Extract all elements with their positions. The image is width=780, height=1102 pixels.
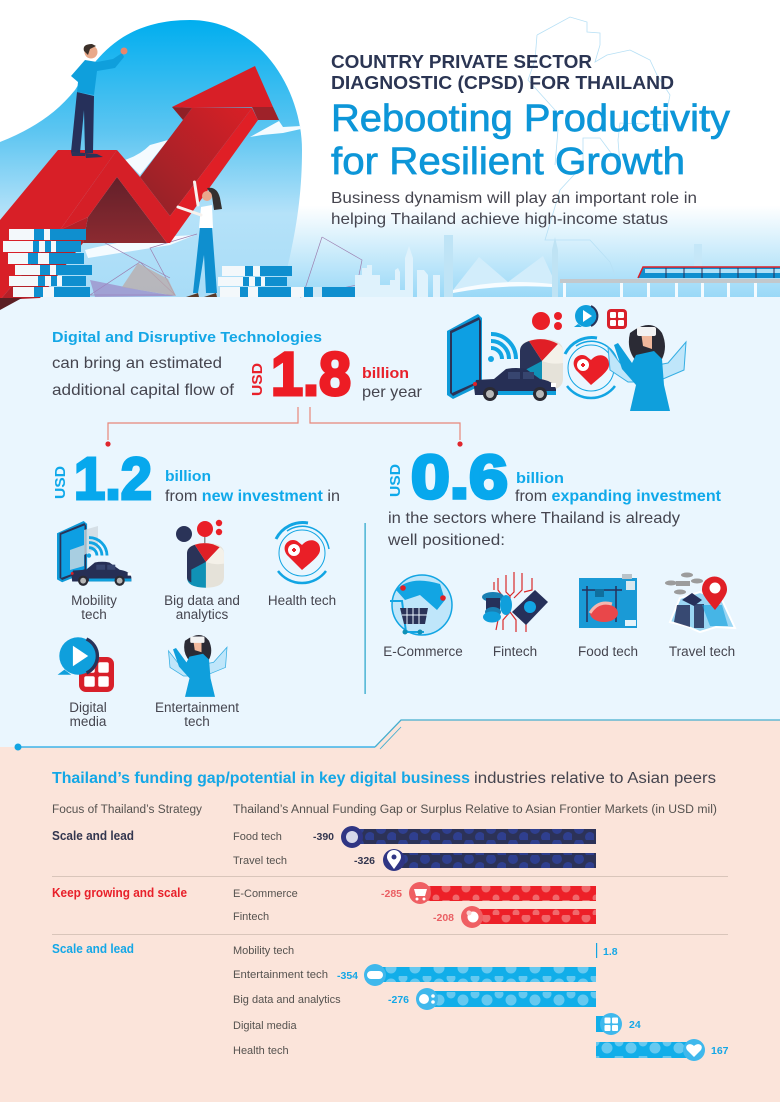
tower	[444, 235, 453, 297]
clouds	[85, 121, 301, 258]
intro text	[52, 329, 322, 399]
bar row: Health tech: 167	[711, 1045, 729, 1057]
big number: USD 0.6 billion: in the sectors where Thailand is already	[388, 510, 680, 527]
intro text: Digital and Disruptive Technologies	[52, 329, 322, 346]
big number: USD 0.6 billion: 0.6	[411, 443, 508, 511]
panel: funding gap	[0, 720, 780, 1102]
icon item: Food tech	[578, 574, 638, 659]
icon: data dots	[532, 312, 562, 330]
network lines	[85, 232, 362, 297]
bar row: Big data and analytics: -276	[388, 994, 409, 1006]
icon item: Health tech	[268, 523, 336, 608]
bridge	[453, 256, 554, 290]
icon item: Travel tech: Travel tech	[669, 644, 735, 659]
bar row: Travel tech: -326	[354, 855, 375, 867]
icon item: Fintech	[482, 572, 548, 659]
icon item: Digital media	[58, 637, 114, 729]
bar row: Entertainment tech	[233, 964, 596, 986]
bar row: Travel tech: Travel tech	[233, 855, 287, 867]
man standing	[71, 44, 128, 158]
illustration: Bangkok skyline and train	[355, 235, 780, 297]
bar row: Travel tech	[233, 849, 596, 871]
main title: Rebooting Productivity	[331, 98, 730, 140]
woman lifting arrow	[178, 182, 222, 297]
red arrow	[0, 66, 279, 310]
report label	[331, 52, 674, 93]
intro text: can bring an estimated	[52, 355, 222, 372]
panel: digital technologies background	[0, 297, 780, 757]
icon item: Big data and analytics: Big data and	[164, 593, 240, 608]
subtitle	[331, 190, 697, 228]
bar row: Mobility tech: 1.8	[603, 946, 618, 958]
bar row: Entertainment tech: Entertainment tech	[233, 969, 328, 981]
connector to 0.6 billion	[310, 407, 463, 447]
icon: play	[574, 305, 597, 327]
big number: USD 1.8 billion per year: 1.8	[271, 340, 351, 408]
column headers: Focus of Thailand’s Strategy	[52, 804, 202, 816]
report label: DIAGNOSTIC (CPSD) FOR THAILAND	[331, 73, 674, 93]
rail viaduct	[560, 279, 780, 283]
map of Thailand outline	[528, 17, 670, 275]
hero technology icons	[447, 305, 686, 411]
icon: health	[565, 338, 618, 398]
bridge deck	[453, 282, 552, 293]
big number: USD 1.2 billion: 1.2	[74, 446, 152, 512]
icon item: Big data and analytics	[164, 520, 240, 622]
report label: COUNTRY PRIVATE SECTOR	[331, 52, 592, 72]
big number: USD 1.2 billion: billion	[165, 468, 211, 485]
bar row: Mobility tech: Mobility tech	[233, 945, 294, 957]
big number: USD 0.6 billion: well positioned:	[387, 532, 505, 549]
icon: apps	[607, 309, 627, 329]
stack of books left	[3, 229, 92, 297]
bar row: Digital media	[233, 1013, 641, 1035]
bar row: Entertainment tech: -354	[337, 970, 358, 982]
big number: USD 1.8 billion per year: billion	[362, 365, 409, 382]
stack of books right	[218, 266, 355, 297]
icon item: Mobility tech: tech	[81, 607, 107, 622]
bar row: Digital media: 24	[629, 1019, 641, 1031]
icon: database	[520, 339, 563, 391]
icon item: Entertainment tech: tech	[184, 714, 210, 729]
bar row: Health tech: Health tech	[233, 1045, 289, 1057]
icon item: Fintech: Fintech	[493, 644, 537, 659]
title block	[331, 52, 730, 228]
strategy group labels: Keep growing and scale	[52, 886, 187, 900]
main title: for Resilient Growth	[331, 141, 685, 183]
big number: USD 1.2 billion: USD	[52, 466, 69, 499]
icon item: Mobility tech: Mobility	[71, 593, 117, 608]
icon item: Entertainment tech: Entertainment	[155, 700, 239, 715]
bar row: Food tech: -390	[313, 831, 334, 843]
subtitle: Business dynamism will play an important role in	[331, 190, 697, 207]
strategy group labels	[52, 829, 187, 956]
icon item: Mobility tech	[57, 521, 131, 622]
column headers	[52, 804, 717, 816]
funding heading: Thailand’s funding gap/potential in key digital business	[52, 770, 470, 787]
icon item: Food tech: Food tech	[578, 644, 638, 659]
big number: USD 1.2 billion: from new investment in	[165, 488, 340, 505]
illustration: hero with arrow and figures	[0, 20, 362, 310]
bar row: Digital media: Digital media	[233, 1020, 297, 1032]
icon item: Digital media: Digital	[69, 700, 107, 715]
bar row: Health tech	[233, 1039, 729, 1061]
icon: phone	[447, 314, 482, 399]
icon item: Entertainment tech	[155, 635, 239, 729]
big number: USD 0.6 billion: from expanding investment	[515, 488, 721, 505]
big number: USD 1.8 billion per year: USD	[249, 363, 266, 396]
big number: USD 1.2 billion	[52, 446, 340, 512]
bar row: Food tech	[233, 826, 596, 848]
bar row: Mobility tech	[233, 943, 618, 958]
bar row: Fintech	[233, 906, 596, 928]
sky blob	[0, 20, 302, 297]
skyline	[355, 246, 440, 297]
far tower	[694, 244, 702, 268]
subtitle: helping Thailand achieve high-income status	[331, 211, 668, 228]
train	[638, 267, 780, 278]
connector to 1.2 billion	[105, 407, 298, 447]
bar row: Food tech: Food tech	[233, 831, 282, 843]
main title	[331, 98, 730, 183]
spire	[552, 237, 558, 297]
network facets	[90, 280, 175, 297]
big number: USD 0.6 billion	[387, 443, 721, 549]
bar row: E-Commerce: E-Commerce	[233, 888, 298, 900]
bar row: Fintech: -208	[433, 912, 454, 924]
funding heading	[52, 770, 716, 787]
bar row: Big data and analytics: Big data and analytics	[233, 994, 341, 1006]
panel: header background	[0, 0, 780, 298]
icon item: Travel tech	[665, 572, 735, 659]
bar row: Fintech: Fintech	[233, 911, 269, 923]
icon item: Health tech: Health tech	[268, 593, 336, 608]
icon item: Big data and analytics: analytics	[176, 607, 229, 622]
icon: VR woman	[608, 325, 686, 411]
big number: USD 1.8 billion per year: per year	[362, 384, 423, 401]
bar row: Big data and analytics	[233, 988, 596, 1010]
strategy group labels: Scale and lead	[52, 829, 134, 843]
strategy group labels: Scale and lead	[52, 942, 134, 956]
funding heading: industries relative to Asian peers	[474, 770, 716, 787]
viaduct pillars	[563, 283, 757, 297]
icon item: E-Commerce	[383, 575, 463, 659]
bar row: E-Commerce: -285	[381, 888, 402, 900]
network facet	[122, 263, 176, 296]
intro text: additional capital flow of	[52, 382, 235, 399]
bar row: E-Commerce	[233, 882, 596, 904]
icon: car	[473, 368, 556, 401]
icon item: Digital media: media	[70, 714, 107, 729]
icon: wifi	[488, 334, 516, 362]
big number: USD 1.8 billion per year	[249, 340, 423, 408]
icon item: E-Commerce: E-Commerce	[383, 644, 463, 659]
section border line	[14, 720, 780, 750]
column headers: Thailand’s Annual Funding Gap or Surplus Relative to Asian Frontier Markets (in USD mil)	[233, 804, 717, 816]
big number: USD 0.6 billion: USD	[387, 464, 404, 497]
big number: USD 0.6 billion: billion	[516, 470, 564, 487]
